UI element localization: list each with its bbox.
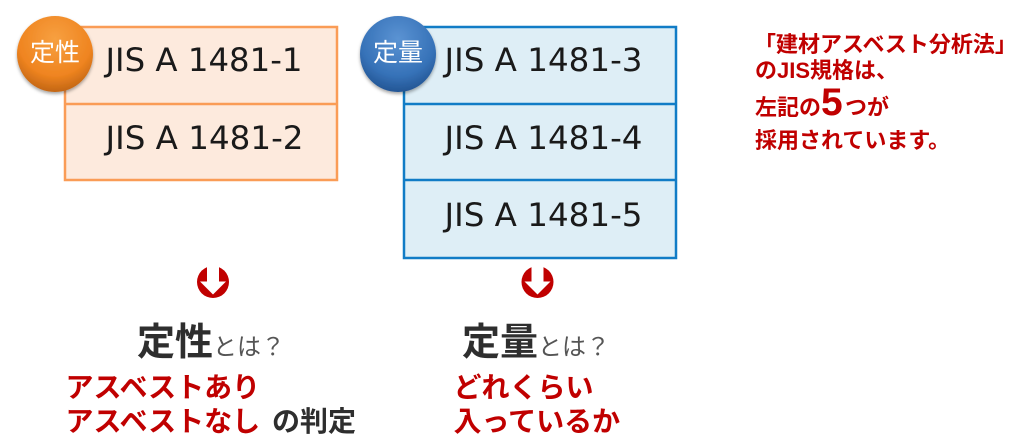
callout: adopted standards note: 左記の — [755, 95, 821, 120]
text: JIS A 1481-1: JIS A 1481-1 — [103, 41, 303, 79]
arrow: down to qualitative — [197, 262, 229, 298]
text: JIS A 1481-3: JIS A 1481-3 — [442, 41, 642, 79]
heading: what is qualitative: 定性とは？ — [137, 322, 285, 364]
text: asbestos absent judgement: の判定 — [272, 406, 356, 437]
text: how much: どれくらい — [454, 372, 594, 403]
text: asbestos present: アスベストあり — [66, 372, 260, 403]
table: qualitative rows — [65, 27, 337, 180]
text: is contained: 入っているか — [454, 406, 620, 437]
block: qualitative definition — [66, 322, 356, 437]
text: JIS A 1481-4: JIS A 1481-4 — [442, 119, 642, 157]
heading: what is quantitative: 定量とは？ — [462, 322, 610, 364]
badge: qualitative — [17, 16, 93, 92]
badge: quantitative — [360, 16, 436, 92]
callout: adopted standards note: 5 — [821, 81, 843, 124]
callout: adopted standards note — [754, 32, 1017, 153]
table: quantitative rows — [404, 27, 676, 258]
text: JIS A 1481-2: JIS A 1481-2 — [103, 119, 303, 157]
text: JIS A 1481-5: JIS A 1481-5 — [442, 196, 642, 234]
callout: adopted standards note: のJIS規格は、 — [755, 58, 898, 83]
callout: adopted standards note: つが — [845, 95, 889, 120]
arrow: down to quantitative — [522, 262, 554, 298]
callout: adopted standards note: 「建材アスベスト分析法」 — [754, 32, 1017, 57]
badge: quantitative: 定量 — [373, 39, 423, 67]
panel: qualitative standards — [17, 16, 337, 180]
panel: quantitative standards — [360, 16, 676, 258]
text: asbestos absent judgement: アスベストなし — [66, 406, 260, 437]
block: quantitative definition — [454, 322, 620, 437]
badge: qualitative: 定性 — [30, 39, 80, 67]
callout: adopted standards note: 採用されています。 — [755, 128, 950, 153]
